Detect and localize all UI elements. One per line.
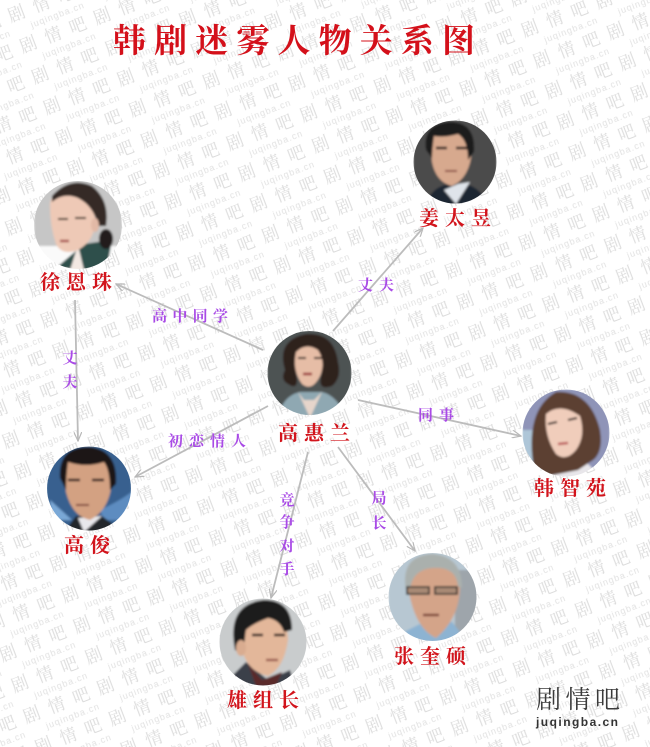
label: rival: 手 [279,561,295,578]
label: husband left [62,349,78,391]
label: first love: 初恋情人 [168,432,246,450]
name: 雄组长 [227,689,299,712]
label: rival: 争 [279,513,295,531]
person: 雄组长 [218,598,308,712]
person: 姜太昱 [413,120,497,230]
label: classmates: 高中同学 [152,307,228,325]
name: 张奎硕 [394,645,467,668]
person: 高俊 [46,446,134,557]
person: 高惠兰 [267,330,352,445]
label: chief: 局 [371,490,387,507]
person: 韩智苑 [522,389,610,500]
person: 张奎硕 [388,552,479,668]
name: 姜太昱 [419,207,491,230]
label: chief [371,490,387,532]
label: husband left: 丈 [62,349,78,367]
label: rival [279,491,295,578]
logo watermark: juqingba.cn [535,715,618,729]
person: 徐恩珠 [34,180,122,294]
logo watermark: 剧情吧 [536,680,620,716]
label: chief: 长 [371,515,387,532]
label: husband right: 丈夫 [358,276,394,294]
name: 韩智苑 [534,476,606,500]
name: 徐恩珠 [40,271,112,294]
title: 韩剧迷雾人物关系图 [113,23,475,60]
name: 高惠兰 [278,421,350,445]
name: 高俊 [64,533,111,557]
label: colleague: 同事 [418,406,454,424]
label: husband left: 夫 [62,374,78,391]
label: rival: 对 [279,537,295,555]
relationship arrows [75,228,521,598]
label: rival: 竞 [279,491,295,509]
